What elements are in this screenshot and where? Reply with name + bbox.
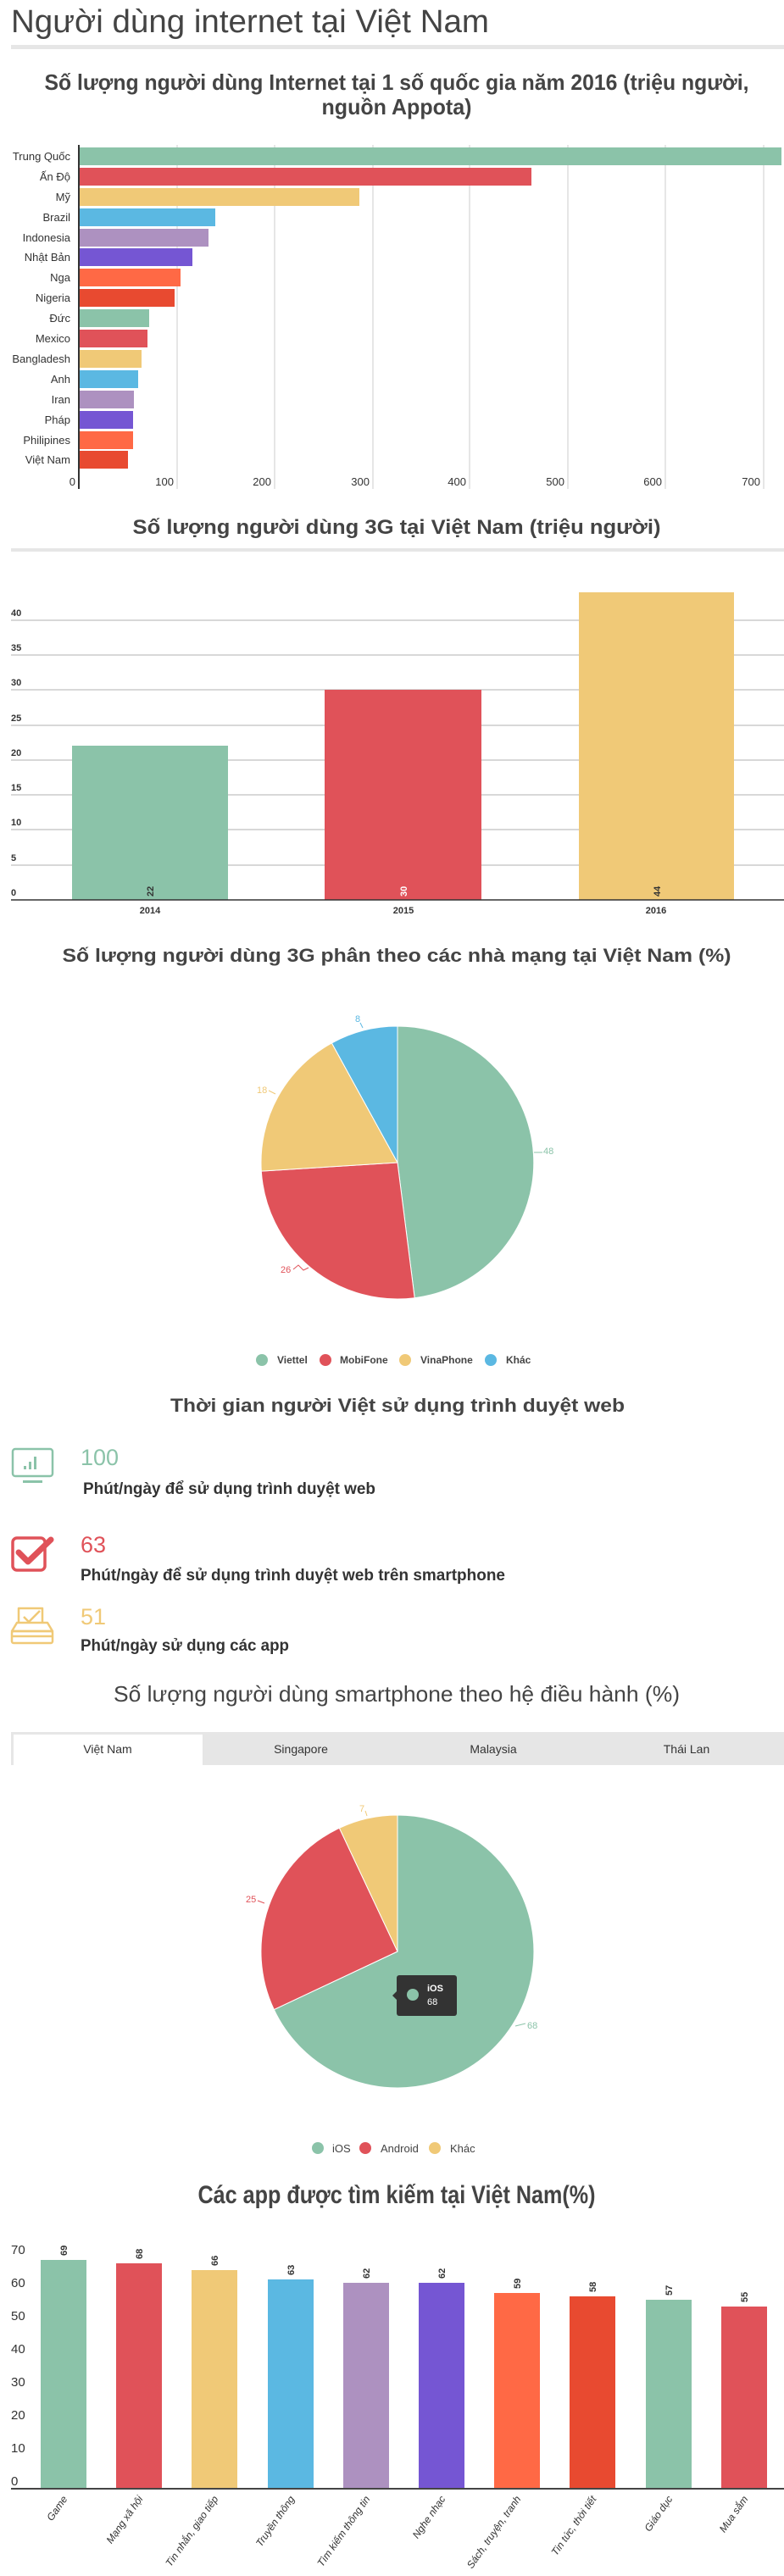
legend: smartphone OS: [312, 2142, 475, 2155]
column chart: apps searched: 63: [286, 2265, 297, 2275]
page title: Người dùng internet tại Việt Nam: [11, 4, 489, 40]
legend: smartphone OS: iOS: [332, 2142, 351, 2155]
horizontal bar chart: internet users: Indonesia: [23, 231, 71, 244]
column chart: apps searched: 58: [588, 2282, 598, 2292]
column chart: apps searched: 59: [513, 2279, 523, 2289]
tabs: countries: Malaysia: [470, 1742, 517, 1756]
column chart: 3G users: 35: [11, 643, 21, 653]
stat row: 63 minutes smartphone: Phút/ngày để sử dụng trình duyệt web trên smartphone: [81, 1567, 505, 1585]
pie chart: 3G operators: 48: [543, 1146, 553, 1157]
stat row: 63 minutes smartphone: 63: [81, 1532, 106, 1557]
horizontal bar chart: internet users: 100: [155, 475, 174, 488]
column chart: apps searched: [11, 2243, 784, 2571]
icon: ballot box: [12, 1608, 53, 1643]
horizontal bar chart: internet users: Nhật Bản: [25, 251, 70, 264]
stat row: 51 minutes apps: [12, 1604, 289, 1655]
horizontal bar chart: internet users: Nga: [50, 271, 71, 284]
heading: internet users chart: Số lượng người dùng Internet tại 1 số quốc gia năm 2016 (triệu người,: [44, 69, 749, 95]
horizontal bar chart: internet users: 400: [448, 475, 466, 488]
pie chart: 3G operators: [257, 1014, 553, 1299]
horizontal bar chart: internet users: 700: [742, 475, 760, 488]
stat row: 51 minutes apps: Phút/ngày sử dụng các app: [81, 1637, 289, 1655]
heading: 3G users: [11, 516, 784, 552]
column chart: apps searched: 66: [210, 2256, 220, 2266]
pie chart: smartphone OS: [246, 1804, 537, 2088]
horizontal bar chart: internet users: Trung Quốc: [13, 150, 70, 163]
column chart: 3G users: 5: [11, 853, 16, 863]
tabs: countries: Thái Lan: [664, 1742, 709, 1756]
heading: browsing time: Thời gian người Việt sử dụng trình duyệt web: [170, 1395, 625, 1416]
legend: smartphone OS: Android: [381, 2142, 419, 2155]
icon: checkbox: [13, 1538, 51, 1570]
column chart: apps searched: 70: [11, 2243, 25, 2257]
column chart: apps searched: 62: [362, 2268, 372, 2279]
stat row: 51 minutes apps: 51: [81, 1604, 106, 1629]
column chart: apps searched: Giáo dục: [642, 2494, 675, 2534]
column chart: apps searched: Nghe nhạc: [410, 2494, 448, 2540]
horizontal bar chart: internet users: Mỹ: [56, 191, 70, 203]
column chart: apps searched: Tìm kiếm thông tin: [314, 2493, 373, 2569]
horizontal bar chart: internet users: Mexico: [36, 332, 70, 345]
stat row: 100 minutes web: Phút/ngày để sử dụng trình duyệt web: [83, 1480, 375, 1498]
column chart: 3G users: 25: [11, 713, 21, 724]
horizontal bar chart: internet users: Nigeria: [36, 291, 71, 304]
column chart: apps searched: 68: [135, 2249, 145, 2259]
horizontal bar chart: internet users: Ấn Độ: [40, 170, 70, 183]
horizontal bar chart: internet users: 0: [70, 475, 75, 488]
stat row: 100 minutes web: 100: [81, 1445, 119, 1470]
horizontal bar chart: internet users: [12, 145, 781, 489]
column chart: apps searched: 50: [11, 2309, 25, 2323]
horizontal bar chart: internet users: Brazil: [42, 211, 70, 224]
horizontal bar chart: internet users: Iran: [52, 393, 70, 406]
heading: internet users chart: [44, 69, 749, 119]
pie chart: 3G operators: 8: [355, 1014, 360, 1024]
horizontal bar chart: internet users: Việt Nam: [25, 453, 70, 466]
column chart: apps searched: 60: [11, 2276, 25, 2290]
horizontal bar chart: internet users: Đức: [49, 312, 70, 325]
horizontal bar chart: internet users: Philipines: [23, 434, 70, 447]
column chart: 3G users: 2014: [140, 906, 161, 916]
tooltip: iOS 68: iOS: [427, 1984, 443, 1994]
tooltip: iOS 68: [392, 1975, 457, 2016]
legend: 3G operators: MobiFone: [340, 1354, 388, 1366]
column chart: apps searched: 20: [11, 2408, 25, 2423]
tabs: countries: [11, 1732, 784, 1766]
pie chart: smartphone OS: 7: [359, 1804, 364, 1814]
column chart: 3G users: 20: [11, 748, 21, 758]
column chart: apps searched: Tin nhắn, giao tiếp: [163, 2493, 221, 2569]
legend: 3G operators: VinaPhone: [420, 1354, 473, 1366]
column chart: 3G users: [11, 592, 784, 916]
column chart: apps searched: Mua sắm: [716, 2493, 750, 2534]
page title: [11, 4, 784, 49]
heading: 3G by operator: Số lượng người dùng 3G phân theo các nhà mạng tại Việt Nam (%): [63, 945, 731, 966]
column chart: apps searched: 62: [437, 2268, 448, 2279]
column chart: 3G users: 2015: [393, 906, 414, 916]
column chart: apps searched: 55: [740, 2292, 750, 2302]
column chart: apps searched: Game: [44, 2493, 70, 2523]
column chart: 3G users: 40: [11, 608, 21, 619]
legend: 3G operators: [256, 1354, 531, 1366]
tabs: countries: Việt Nam: [83, 1742, 132, 1756]
column chart: 3G users: 22: [146, 886, 156, 897]
tooltip: iOS 68: 68: [427, 1997, 437, 2007]
pie chart: smartphone OS: 68: [527, 2021, 537, 2031]
column chart: apps searched: Truyền thông: [253, 2493, 297, 2549]
legend: 3G operators: Khác: [506, 1354, 531, 1366]
column chart: 3G users: 0: [11, 888, 16, 898]
column chart: apps searched: 57: [664, 2285, 675, 2296]
heading: 3G users: Số lượng người dùng 3G tại Việt Nam (triệu người): [132, 516, 661, 539]
legend: smartphone OS: Khác: [450, 2142, 475, 2155]
column chart: 3G users: 30: [11, 678, 21, 688]
column chart: 3G users: 2016: [646, 906, 666, 916]
stat row: 100 minutes web: [13, 1445, 375, 1498]
pie chart: 3G operators: 18: [257, 1085, 267, 1096]
heading: apps searched: Các app được tìm kiếm tại Việt Nam(%): [198, 2181, 595, 2209]
column chart: 3G users: 44: [653, 886, 663, 897]
horizontal bar chart: internet users: Anh: [51, 373, 70, 386]
horizontal bar chart: internet users: 300: [351, 475, 370, 488]
horizontal bar chart: internet users: Bangladesh: [12, 353, 70, 365]
pie chart: 3G operators: 26: [281, 1265, 291, 1275]
column chart: 3G users: 30: [399, 886, 409, 897]
horizontal bar chart: internet users: Pháp: [45, 414, 70, 426]
column chart: apps searched: 30: [11, 2375, 25, 2390]
legend: 3G operators: Viettel: [277, 1354, 308, 1366]
horizontal bar chart: internet users: 600: [643, 475, 662, 488]
horizontal bar chart: internet users: 500: [546, 475, 564, 488]
heading: internet users chart: nguồn Appota): [322, 94, 471, 119]
column chart: apps searched: 69: [59, 2246, 70, 2256]
stat row: 63 minutes smartphone: [13, 1532, 505, 1585]
column chart: 3G users: 10: [11, 818, 21, 828]
column chart: apps searched: 40: [11, 2342, 25, 2357]
heading: smartphone OS: Số lượng người dùng smartphone theo hệ điều hành (%): [114, 1681, 680, 1707]
pie chart: smartphone OS: 25: [246, 1895, 256, 1905]
column chart: apps searched: 0: [11, 2474, 18, 2489]
horizontal bar chart: internet users: 200: [253, 475, 271, 488]
icon: monitor chart: [13, 1449, 53, 1483]
column chart: apps searched: Mạng xã hội: [103, 2493, 146, 2545]
column chart: apps searched: 10: [11, 2441, 25, 2456]
column chart: 3G users: 15: [11, 783, 21, 793]
column chart: apps searched: Tin tức, thời tiết: [549, 2493, 599, 2558]
column chart: apps searched: Sách, truyện, tranh: [464, 2493, 524, 2571]
tabs: countries: Singapore: [274, 1742, 328, 1756]
